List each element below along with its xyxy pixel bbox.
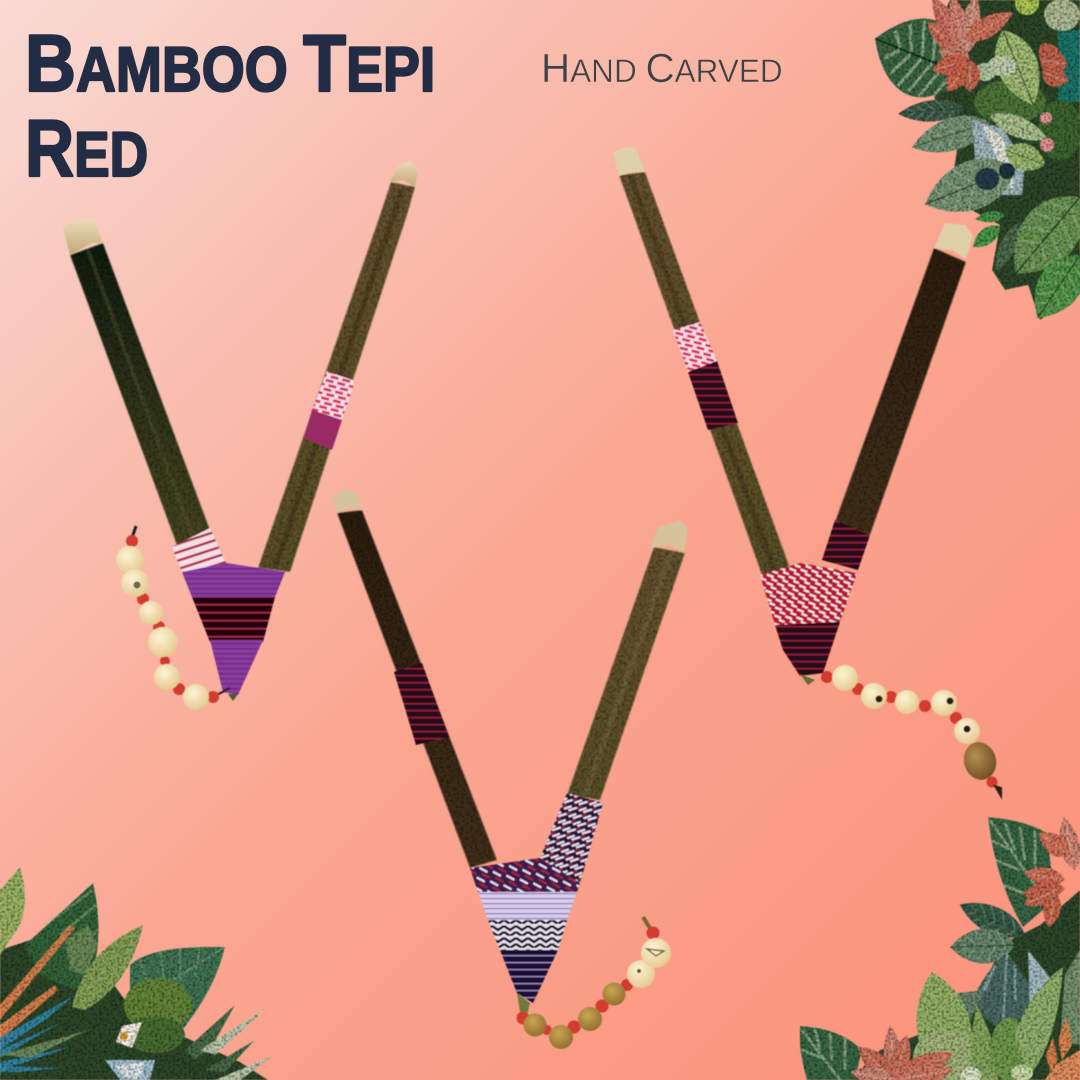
right tepi: cut tips bbox=[613, 147, 973, 259]
title: Bamboo Tepi Red: BAMBOO TEPI bbox=[25, 19, 435, 109]
left tepi: V wrap bbox=[172, 528, 285, 701]
bottom-right foliage bbox=[800, 815, 1080, 1080]
title: Bamboo Tepi Red bbox=[25, 19, 435, 193]
centre tepi: V wrap bbox=[470, 793, 603, 1015]
product: left tepi bbox=[63, 161, 418, 710]
centre tepi: left arm bbox=[337, 510, 497, 868]
bottom-left foliage bbox=[0, 867, 275, 1080]
left tepi: left arm bbox=[70, 243, 210, 548]
centre tepi: cut tips bbox=[332, 489, 688, 553]
left tepi: right arm bbox=[258, 182, 415, 572]
left tepi: arm wrap bbox=[304, 371, 355, 450]
right tepi: right arm bbox=[835, 248, 966, 535]
right tepi: V wrap bbox=[760, 520, 870, 685]
left tepi: bead string bbox=[116, 526, 230, 710]
right tepi: bead string bbox=[821, 665, 1001, 796]
product: right tepi bbox=[613, 147, 1001, 796]
title: Bamboo Tepi Red: RED bbox=[25, 104, 148, 193]
subtitle: Hand Carved: HAND CARVED bbox=[541, 45, 783, 91]
centre tepi: arm wrap bbox=[394, 663, 449, 745]
centre tepi: bead string bbox=[516, 917, 671, 1049]
product: centre tepi bbox=[332, 489, 688, 1049]
left tepi: cut tips bbox=[63, 161, 418, 255]
centre tepi: right arm bbox=[567, 547, 685, 800]
top-right foliage bbox=[860, 0, 1080, 330]
right tepi: arm wrap bbox=[673, 322, 738, 430]
right tepi: left arm bbox=[619, 172, 790, 575]
